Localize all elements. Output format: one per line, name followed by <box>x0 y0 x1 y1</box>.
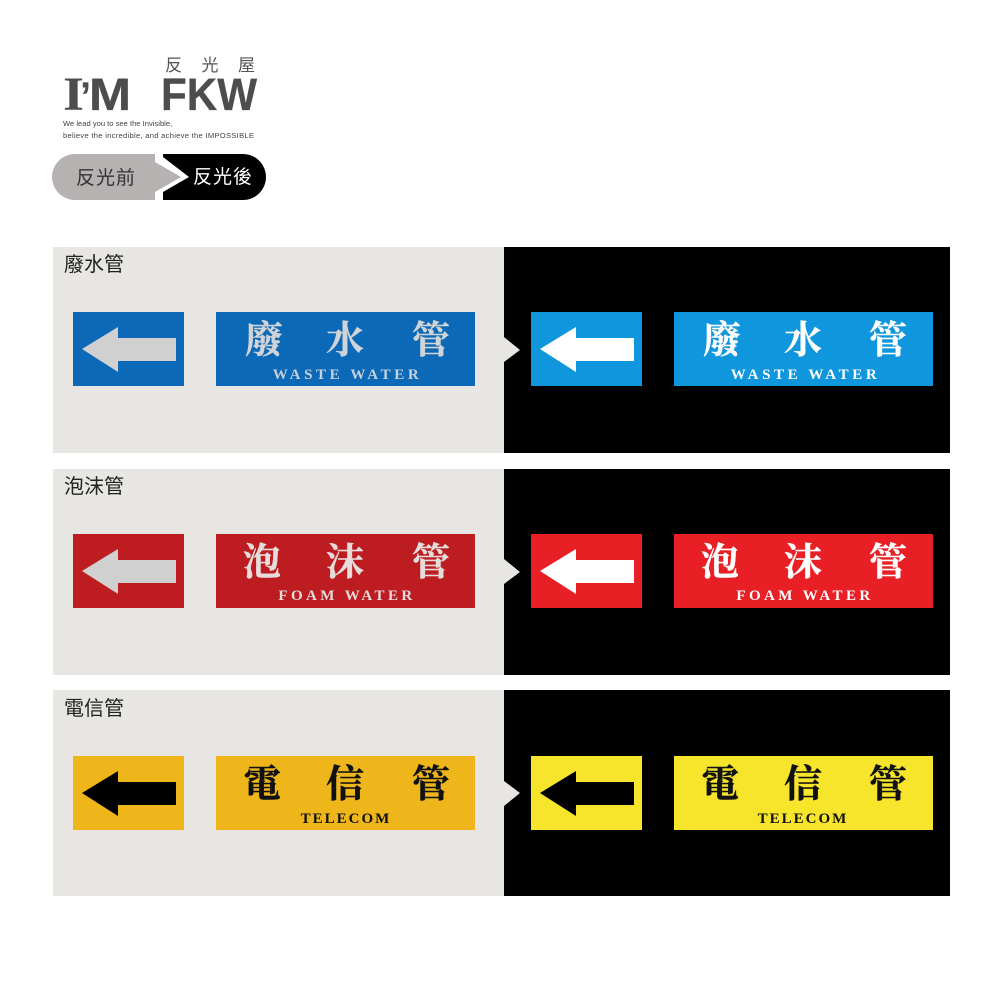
after: foam water label: 沫 <box>784 542 822 584</box>
after: waste water label: 水 <box>784 320 822 362</box>
heading: waste water: 廢水管 <box>64 253 124 276</box>
legend: before and after reflection: 反光前 <box>76 167 136 189</box>
before: waste water label: WASTE WATER <box>273 367 422 383</box>
heading: telecom: 電信管 <box>64 697 124 720</box>
logo: I'M FKW: FKW <box>161 69 257 120</box>
heading: foam water: 泡沫管 <box>64 475 124 498</box>
logo: I'M FKW: I <box>63 68 84 121</box>
before: foam water arrow sign <box>73 534 184 608</box>
after: waste water label: WASTE WATER <box>731 367 880 383</box>
before: foam water label: 沫 <box>326 542 364 584</box>
before: waste water label: 管 <box>412 320 450 362</box>
before: foam water label <box>216 534 475 608</box>
after: telecom arrow sign <box>531 756 642 830</box>
logo: I'M FKW: We lead you to see the Invisible, <box>63 119 172 128</box>
before: telecom label: 電 <box>243 764 281 806</box>
after: telecom label: TELECOM <box>758 811 848 827</box>
after: waste water label: 廢 <box>703 320 741 362</box>
panel: waste water pipe <box>53 247 950 453</box>
panel: telecom pipe <box>53 690 950 896</box>
panel: foam water pipe <box>53 469 950 675</box>
after: foam water label <box>674 534 933 608</box>
before: waste water label <box>216 312 475 386</box>
after: telecom label: 信 <box>784 764 822 806</box>
after: telecom label <box>674 756 933 830</box>
before: telecom arrow sign <box>73 756 184 830</box>
logo: I'M FKW: believe the incredible, and achieve the IMPOSSIBLE <box>63 131 254 140</box>
logo: I'M FKW: ’ <box>80 75 91 119</box>
before: telecom label <box>216 756 475 830</box>
before: foam water label: 泡 <box>243 542 281 584</box>
logo: I'M FKW <box>63 56 274 140</box>
legend: before and after reflection <box>52 154 266 200</box>
after: waste water label: 管 <box>869 320 907 362</box>
after: telecom label: 管 <box>869 764 907 806</box>
after: foam water label: 管 <box>869 542 907 584</box>
before: telecom label: TELECOM <box>301 811 391 827</box>
before: waste water label: 廢 <box>245 320 283 362</box>
before: waste water label: 水 <box>326 320 364 362</box>
before: waste water arrow sign <box>73 312 184 386</box>
before: telecom label: 信 <box>326 764 364 806</box>
logo: I'M FKW: M <box>89 69 131 120</box>
after: foam water label: 泡 <box>701 542 739 584</box>
before: foam water label: 管 <box>412 542 450 584</box>
after: waste water label <box>674 312 933 386</box>
before: telecom label: 管 <box>412 764 450 806</box>
logo: I'M FKW: 反光屋 <box>165 56 274 75</box>
after: foam water arrow sign <box>531 534 642 608</box>
after: telecom label: 電 <box>701 764 739 806</box>
before: foam water label: FOAM WATER <box>278 588 416 604</box>
legend: before and after reflection: 反光後 <box>193 166 253 188</box>
after: waste water arrow sign <box>531 312 642 386</box>
after: foam water label: FOAM WATER <box>736 588 874 604</box>
